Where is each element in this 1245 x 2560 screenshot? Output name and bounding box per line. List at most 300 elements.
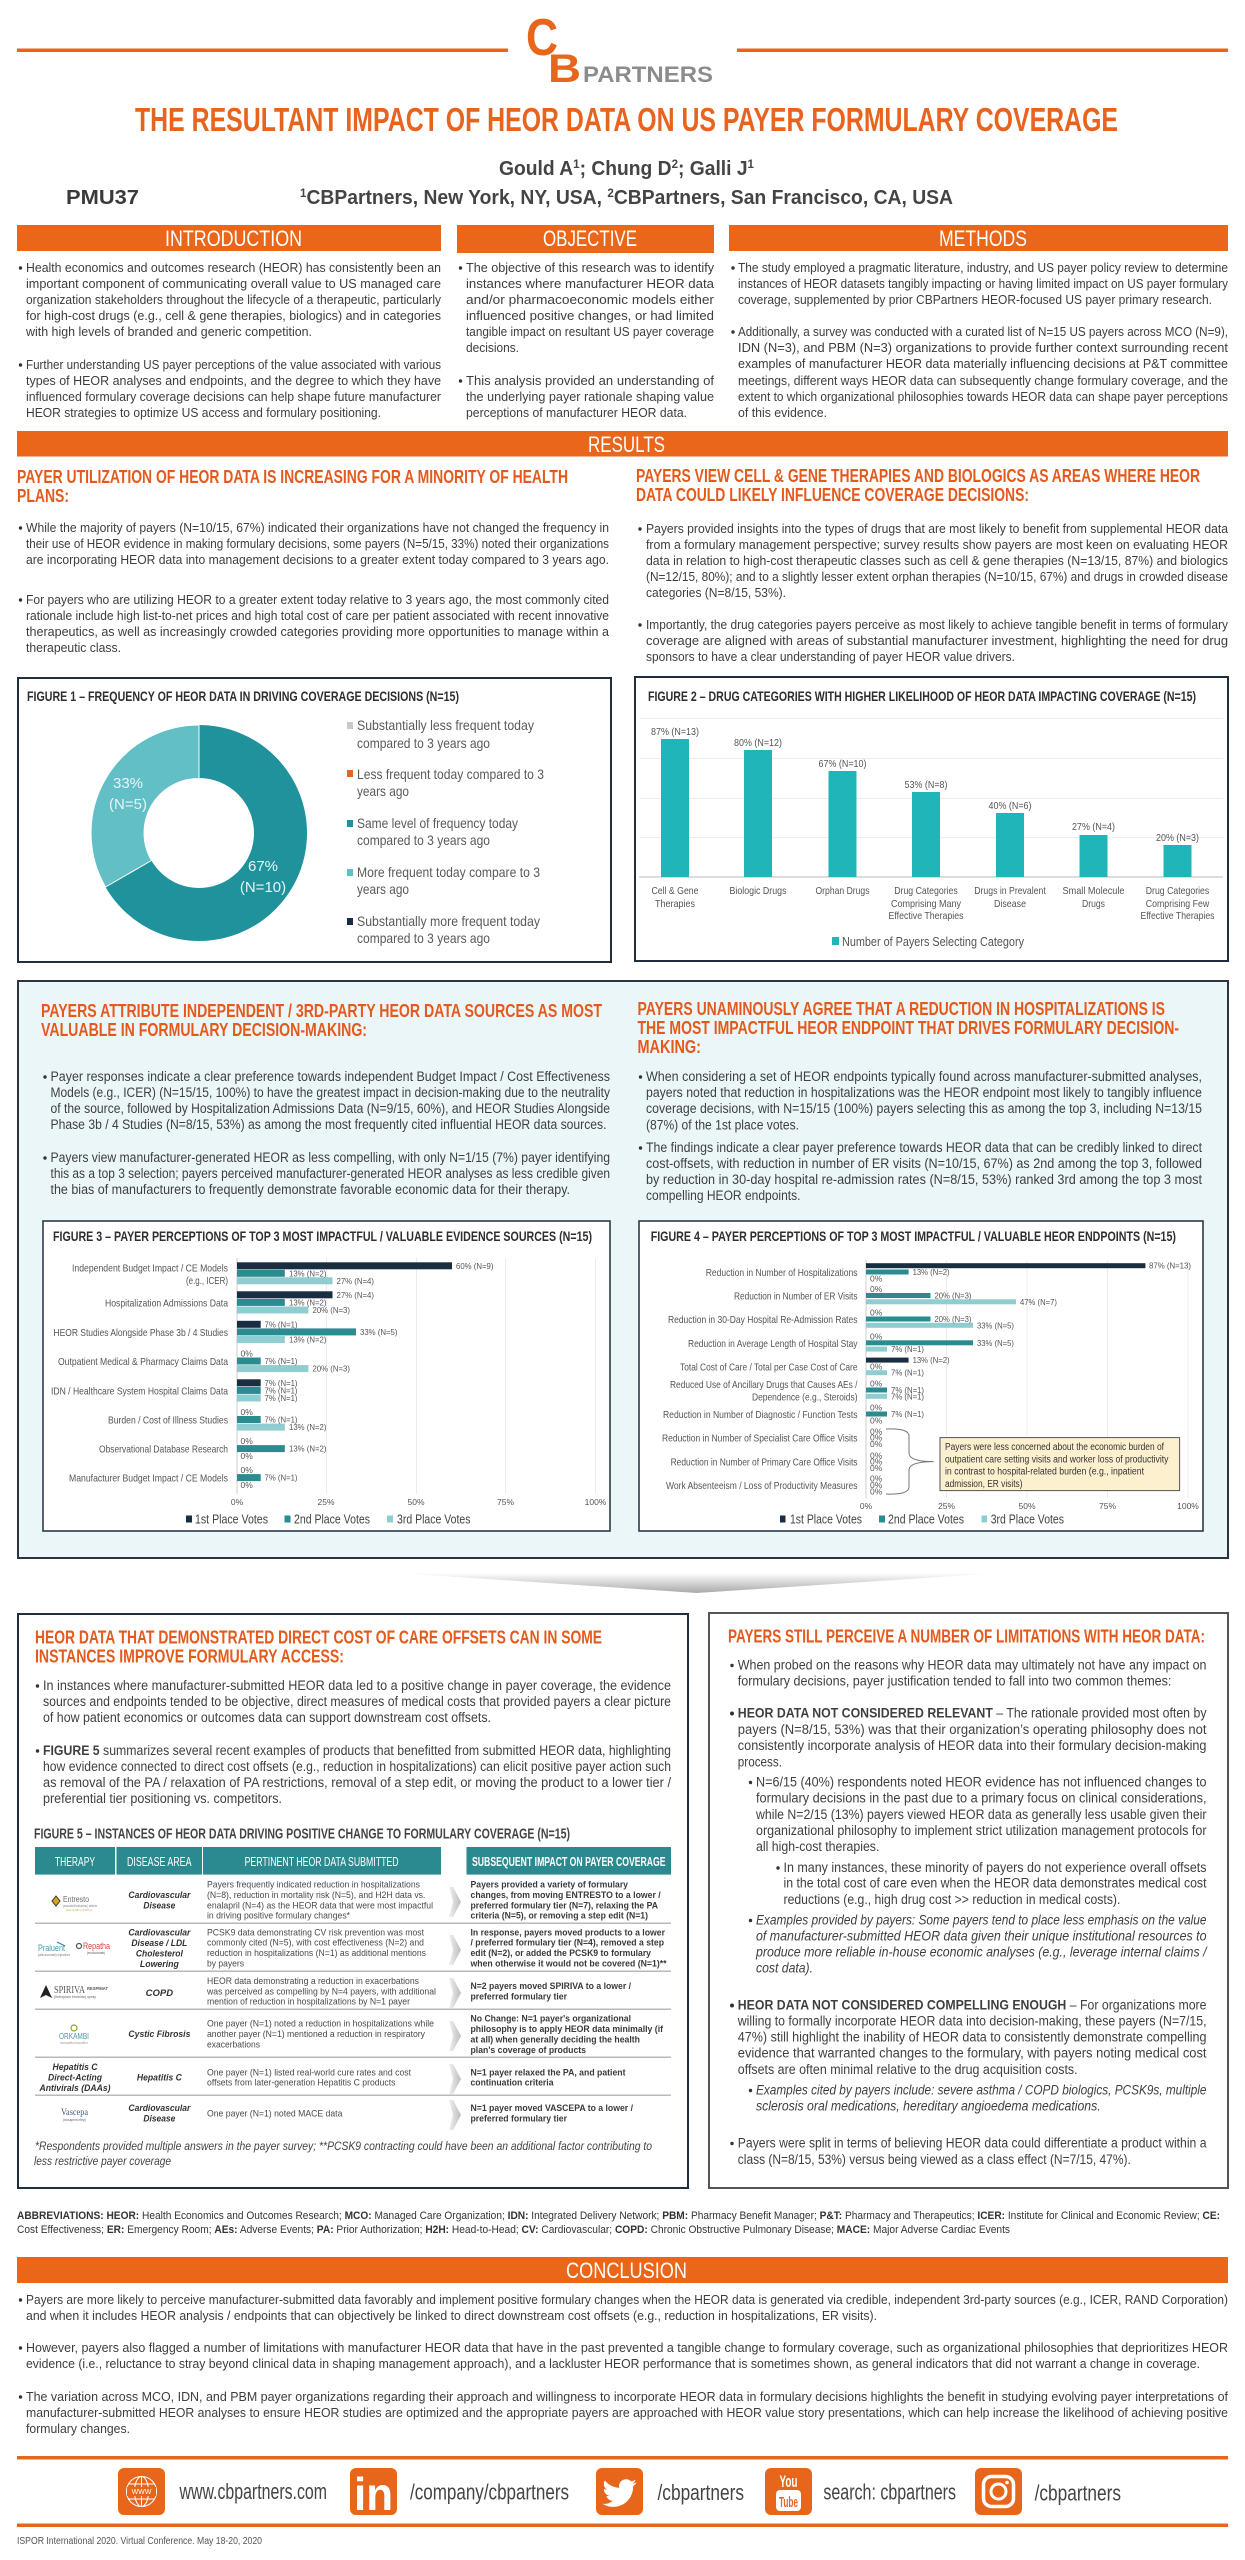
website link: www.cbpartners.com	[179, 2479, 327, 2504]
row: vascepa	[61, 2103, 633, 2124]
bar chart: figure 3: 0%	[240, 1480, 253, 1490]
bar chart: figure 4: Reduction in Number of Hospitalizations	[706, 1267, 858, 1279]
text block: cell and gene therapies: sponsors to have a clear understanding of payer HEOR value drivers.	[646, 649, 1015, 664]
row: entresto: criteria (N=5), or removing a step edit (N=1)	[470, 1911, 648, 1921]
panel: figure 4	[639, 1221, 1203, 1531]
bar chart: figure 2: 80% (N=12)	[734, 737, 782, 749]
logo: entresto	[52, 1895, 97, 1912]
panel: independent sources and endpoints	[18, 981, 1228, 1558]
section: payer utilization	[17, 467, 610, 655]
text block: objective: This analysis provided an understanding of	[466, 373, 714, 388]
row: orkambi: No Change: N=1 payer's organizational	[470, 2014, 631, 2024]
row: vascepa: Disease	[143, 2114, 176, 2124]
donut chart: (N=10)	[240, 879, 286, 896]
bar chart: figure 2: Effective Therapies	[888, 910, 964, 922]
row: entresto: Payers frequently indicated reduction in hospitalizations	[207, 1880, 420, 1890]
authors	[499, 157, 754, 180]
heading: direct cost offsets: INSTANCES IMPROVE FORMULARY ACCESS:	[35, 1646, 344, 1666]
row: hepatitis c: offsets from later-generation Hepatitis C products	[207, 2078, 396, 2088]
row: entresto	[52, 1880, 661, 1921]
icon: website	[118, 2468, 165, 2515]
bar chart: figure 4: 13% (N=2)	[913, 1355, 950, 1365]
text block: conclusion: and when it includes HEOR analysis / endpoints that can objectively be linked to direct downstream cost offsets (e.g., reduction in hospitalizations, ER visits).	[26, 2308, 877, 2323]
bar chart: figure 4: 75%	[1099, 1501, 1116, 1511]
legend: figure 4: 1st Place Votes	[790, 1512, 862, 1526]
text block: limitations: willing to formally incorporate HEOR data into decision-making, these payers (N=7/15,	[737, 2014, 1206, 2028]
footnote	[34, 2139, 652, 2168]
bar chart: figure 2: 27% (N=4)	[1072, 821, 1115, 833]
bar chart: figure 4: Reduction in Number of Specialist Care Office Visits	[662, 1433, 858, 1445]
text block: hospitalizations endpoint: When considering a set of HEOR endpoints typically found across manufacturer-submitted analyses,	[646, 1069, 1202, 1084]
heading: payer utilization	[17, 467, 568, 506]
text block: limitations: process.	[738, 1754, 782, 1770]
bar chart: figure 2: Drugs in Prevalent	[974, 885, 1046, 897]
logo: praluent and repatha: Repatha	[83, 1941, 110, 1951]
icon: website: WWW	[132, 2489, 152, 2496]
section: cell and gene therapies	[636, 466, 1229, 664]
text block: independent sources: Models (e.g., ICER) (N=15/15, 100%) to have the greatest impact in decision-making due to the neutrality	[50, 1085, 610, 1100]
text block: cell and gene therapies: from a formulary management perspective; survey results show payers are most keen on evaluating HEOR	[646, 537, 1228, 552]
donut chart: 67%	[248, 858, 278, 875]
row: entresto: in driving positive formulary changes*	[207, 1911, 350, 1921]
authors: 2	[672, 157, 678, 171]
bar chart: figure 4: 0%	[870, 1361, 883, 1371]
icon: youtube	[765, 2468, 812, 2515]
row: entresto: preferred formulary tier (N=7), relaxing the PA	[470, 1900, 658, 1910]
text block: conclusion	[19, 2292, 1228, 2436]
text block: direct cost offsets: as removal of the PA / relaxation of PA restrictions, removal of a step edit, or moving the product to a lower tier /	[43, 1775, 671, 1790]
heading: cell and gene therapies: DATA COULD LIKELY INFLUENCE COVERAGE DECISIONS:	[636, 485, 1029, 505]
bar chart: figure 2: Disease	[994, 898, 1026, 910]
bar chart: figure 4: 0%	[870, 1433, 883, 1443]
text block: introduction: important component of communicating overall value to US managed care	[26, 276, 441, 291]
text block: limitations: HEOR DATA NOT CONSIDERED COMPELLING ENOUGH – For organizations more	[738, 1998, 1206, 2012]
row: pcsk9: by payers	[207, 1959, 244, 1969]
row: pcsk9: PCSK9 data demonstrating CV risk prevention was most	[207, 1927, 424, 1937]
callout: outpatient care setting visits and worker loss of productivity	[945, 1454, 1168, 1466]
text block: introduction: influenced formulary coverage decisions can help shape future manufacturer	[26, 389, 442, 404]
bar chart: figure 2: Drug Categories	[894, 885, 958, 897]
abbreviations: Cost Effectiveness; ER: Emergency Room; AEs: Adverse Events; PA: Prior Authorization; H2H: Head-to-Head; CV: Cardiovascular; COPD: Chronic Obstructive Pulmonary Disease; MACE: Major Adverse Cardiac Events	[17, 2224, 1010, 2236]
heading: conclusion: CONCLUSION	[566, 2258, 687, 2283]
bar chart: figure 2: Cell & Gene	[652, 885, 699, 897]
instagram link: /cbpartners	[1035, 2480, 1121, 2506]
bar chart: figure 4: 0%	[860, 1501, 873, 1511]
logo: orkambi	[59, 2025, 89, 2045]
row: orkambi: exacerbations	[207, 2040, 260, 2050]
text block: hospitalizations endpoint: cost-offsets, with reduction in number of ER visits (N=10/15, 67%) as 2nd among the top 3, followed	[646, 1156, 1202, 1171]
authors: ; Galli J	[678, 158, 748, 180]
affiliations: CBPartners, New York, NY, USA,	[306, 187, 607, 209]
bar chart: figure 3	[51, 1258, 607, 1507]
heading: payer utilization: PLANS:	[17, 486, 69, 506]
legend: figure 4: 3rd Place Votes	[991, 1512, 1064, 1526]
panel: introduction	[17, 225, 442, 420]
heading: payer utilization: PAYER UTILIZATION OF HEOR DATA IS INCREASING FOR A MINORITY OF HEALTH	[17, 467, 568, 487]
bar chart: figure 3: 13% (N=2)	[289, 1334, 327, 1344]
arrow: wedge	[397, 1573, 1000, 1593]
text block: payer utilization: For payers who are utilizing HEOR to a greater extent today relative to 3 years ago, the most commonly cited	[26, 592, 609, 607]
logo: spiriva: RESPIMAT	[87, 1986, 108, 1991]
bar chart: figure 3: 7% (N=1)	[264, 1385, 298, 1395]
legend: figure 1: More frequent today compare to 3	[357, 864, 540, 880]
footer: conference: ISPOR International 2020. Virtual Conference. May 18-20, 2020	[17, 2536, 262, 2547]
row: pcsk9: commonly cited (N=5), with cost effectiveness (N=2) and	[207, 1938, 424, 1948]
row: spiriva: was perceived as compelling by N=4 payers, with additional	[206, 1986, 436, 1996]
table header: THERAPY	[55, 1855, 95, 1869]
bar chart: figure 4: Total Cost of Care / Total per Case Cost of Care	[680, 1361, 858, 1373]
text block: cell and gene therapies	[638, 521, 1229, 664]
text block: introduction: organization stakeholders throughout the lifecycle of a therapeutic, particularly	[26, 292, 441, 307]
text block: hospitalizations endpoint: (87%) of the 1st place votes.	[646, 1118, 799, 1132]
text block: limitations: offsets are often minimal relative to the drug acquisition costs.	[738, 2062, 1078, 2077]
figure 3 title: FIGURE 3 – PAYER PERCEPTIONS OF TOP 3 MOST IMPACTFUL / VALUABLE EVIDENCE SOURCES (N=15)	[53, 1228, 592, 1244]
row: spiriva: HEOR data demonstrating a reduction in exacerbations	[207, 1976, 419, 1986]
row: pcsk9	[38, 1927, 667, 1970]
row: entresto: Cardiovascular	[128, 1890, 192, 1901]
bar chart: figure 4: 33% (N=5)	[977, 1320, 1014, 1330]
text block: introduction: HEOR strategies to optimize US access and formulary positioning.	[26, 405, 381, 420]
panel: figure 1	[18, 678, 611, 962]
icon: instagram	[975, 2468, 1022, 2515]
text block: independent sources: Payer responses indicate a clear preference towards independent Budget Impact / Cost Effectiveness	[50, 1069, 610, 1084]
bar chart: figure 4: Dependence (e.g., Steroids)	[752, 1392, 858, 1404]
row: orkambi	[59, 2014, 664, 2055]
bar chart: figure 4: 25%	[938, 1501, 955, 1511]
text block: objective: instances where manufacturer HEOR data	[466, 276, 715, 291]
text block: payer utilization	[19, 520, 610, 655]
text block: methods	[731, 260, 1228, 420]
social links	[118, 2468, 1121, 2520]
row: spiriva: preferred formulary tier	[470, 1991, 567, 2001]
row: orkambi: plan's coverage of products	[470, 2045, 586, 2055]
legend: figure 1: years ago	[357, 881, 409, 897]
affiliations: 1	[300, 186, 307, 200]
legend: figure 2: Number of Payers Selecting Category	[842, 934, 1024, 949]
logo: CBPartners: C	[526, 9, 558, 67]
bar chart: figure 2: Orphan Drugs	[816, 885, 870, 897]
authors: 1	[748, 157, 754, 171]
text block: hospitalizations endpoint: The findings indicate a clear payer preference towards HEOR data that can be credibly linked to direct	[646, 1140, 1202, 1155]
row: hepatitis c: N=1 payer relaxed the PA, and patient	[470, 2068, 626, 2078]
text block: conclusion: However, payers also flagged a number of limitations with manufacturer HEOR data that have in the past prevented a tangible change to formulary coverage, such as organizational philosophies that deprioritizes HEOR	[26, 2340, 1228, 2355]
bar chart: figure 2: 20% (N=3)	[1156, 832, 1199, 844]
bar chart: figure 3: (e.g., ICER)	[186, 1275, 228, 1287]
logo: praluent and repatha: Praluent	[38, 1943, 65, 1953]
text block: introduction: Health economics and outcomes research (HEOR) has consistently been an	[26, 260, 441, 275]
panel: figure 3	[43, 1221, 610, 1531]
bar chart: figure 2: 67% (N=10)	[818, 758, 866, 770]
bar chart: figure 2: Small Molecule	[1062, 885, 1125, 897]
bar chart: figure 3: 13% (N=2)	[289, 1268, 327, 1278]
text block: limitations: all high-cost therapies.	[756, 1839, 879, 1854]
row: pcsk9: Lowering	[140, 1959, 179, 1970]
text block: objective: The objective of this research was to identify	[466, 260, 714, 275]
text block: limitations: formulary decisions in the past due to a primary focus on clinical considerations,	[756, 1791, 1206, 1806]
heading: independent sources: VALUABLE IN FORMULARY DECISION-MAKING:	[41, 1020, 367, 1040]
text block: direct cost offsets: sources and endpoints tended to be objective, direct measures of medical costs that provided payers a clear picture	[43, 1694, 671, 1709]
icon: youtube: You	[780, 2472, 798, 2491]
row: pcsk9: / preferred formulary tier (N=4), removed a step	[470, 1938, 664, 1948]
figure 5 title: FIGURE 5 – INSTANCES OF HEOR DATA DRIVING POSITIVE CHANGE TO FORMULARY COVERAGE (N=15)	[34, 1826, 570, 1842]
bar chart: figure 2: 40% (N=6)	[988, 800, 1032, 812]
bar chart: figure 2: 53% (N=8)	[904, 779, 948, 791]
abbreviations	[17, 2210, 1220, 2236]
bar chart: figure 4: 0%	[870, 1426, 883, 1436]
text block: objective: influenced positive changes, or had limited	[466, 308, 714, 323]
logo: spiriva	[40, 1985, 108, 1999]
row: hepatitis c: Hepatitis C	[137, 2072, 182, 2084]
bar chart: figure 2: 87% (N=13)	[651, 726, 699, 738]
text block: direct cost offsets: of how patient economics or outcomes data can support downstream cost offsets.	[43, 1710, 491, 1725]
callout: Payers were less concerned about the economic burden of	[945, 1442, 1164, 1453]
text block: conclusion: formulary changes.	[26, 2421, 130, 2436]
affiliations: 2	[607, 186, 614, 200]
row: hepatitis c: continuation criteria	[470, 2078, 554, 2088]
row: pcsk9: reduction in hospitalizations (N=1) as additional mentions	[207, 1948, 426, 1958]
text block: methods: IDN (N=3), and PBM (N=3) organizations to provide further context surrounding recent	[738, 340, 1228, 355]
bar chart: figure 3: 33% (N=5)	[360, 1327, 398, 1337]
row: spiriva: N=2 payers moved SPIRIVA to a lower /	[470, 1981, 631, 1991]
bar chart: figure 3: 20% (N=3)	[312, 1364, 350, 1374]
bar chart: figure 3: 13% (N=2)	[289, 1444, 327, 1454]
twitter link: /cbpartners	[658, 2480, 744, 2505]
bar chart: figure 4: Reduction in Number of Diagnostic / Function Tests	[663, 1409, 858, 1421]
logo: CBPartners	[526, 9, 713, 91]
panel: limitations	[709, 1613, 1228, 2188]
row: orkambi: another payer (N=1) mentioned a reduction in respiratory	[207, 2029, 425, 2039]
donut chart	[91, 725, 286, 914]
bar chart: figure 4: Reduction in Number of ER Visits	[734, 1290, 858, 1302]
row: hepatitis c: Direct-Acting	[48, 2072, 102, 2084]
arrows: table rows	[449, 1887, 461, 2130]
legend: figure 1: years ago	[357, 783, 409, 799]
bar chart: figure 2	[639, 718, 1223, 922]
text block: hospitalizations endpoint: by reduction in 30-day hospital re-admission rates (N=8/15, 53%) ranked 3rd among the top 3 most	[646, 1172, 1202, 1187]
text block: limitations: produce more reliable in-house economic analyses (e.g., leverage internal claims /	[755, 1944, 1208, 1960]
bar chart: figure 3: 27% (N=4)	[336, 1276, 374, 1286]
text block: limitations: payers (N=8/15, 53%) was that their organization’s operating philosophy does not	[738, 1722, 1207, 1737]
affiliations	[300, 186, 953, 209]
text block: limitations: formulary decisions, payer justification tended to fall into two common themes:	[738, 1674, 1171, 1689]
row: orkambi: Cystic Fibrosis	[128, 2029, 190, 2040]
bar chart: figure 4: 0%	[870, 1463, 883, 1473]
bar chart: figure 3: HEOR Studies Alongside Phase 3b / 4 Studies	[54, 1327, 228, 1339]
text block: payer utilization: are incorporating HEOR data into management decisions to a greater extent today compared to 3 years ago.	[26, 552, 609, 567]
footnote: *Respondents provided multiple answers in the payer survey; **PCSK9 contracting could have been an additional factor contributing to	[35, 2139, 652, 2153]
bar chart: figure 4: 7% (N=1)	[891, 1385, 924, 1395]
text block: independent sources: this as a top 3 selection; payers perceived manufacturer-generated HEOR analyses as less credible given	[50, 1166, 610, 1181]
bar chart: figure 4: 0%	[870, 1439, 883, 1449]
row: vascepa: Cardiovascular	[128, 2103, 192, 2114]
row: spiriva: mention of reduction in hospitalizations by N=1 payer	[207, 1997, 410, 2007]
bar chart: figure 3: 75%	[497, 1497, 514, 1507]
legend: figure 1: compared to 3 years ago	[357, 735, 490, 751]
text block: hospitalizations endpoint	[639, 1069, 1202, 1203]
row: entresto: enalapril (N=4) as the HEOR data that were most impactful	[207, 1900, 433, 1910]
text block: payer utilization: While the majority of payers (N=10/15, 67%) indicated their organizations have not changed the frequency in	[26, 520, 609, 535]
row: spiriva	[40, 1976, 631, 2007]
bar chart: figure 4: 87% (N=13)	[1149, 1261, 1191, 1271]
bar chart: figure 4: 20% (N=3)	[934, 1290, 972, 1300]
bar chart: figure 2: Effective Therapies	[1140, 910, 1214, 922]
logo: entresto: 24/26 mg 49/51 mg 97/103 mg	[66, 1908, 92, 1912]
logo: orkambi: ORKAMBI	[59, 2032, 89, 2041]
bar chart: figure 4: 47% (N=7)	[1020, 1297, 1057, 1307]
legend: figure 1: Same level of frequency today	[357, 815, 518, 831]
icon: twitter	[596, 2468, 643, 2515]
bar chart: figure 3: 13% (N=2)	[289, 1297, 327, 1307]
text block: objective: decisions.	[466, 340, 519, 355]
icon: youtube: Tube	[779, 2494, 798, 2511]
heading: independent sources	[41, 1001, 602, 1040]
text block: hospitalizations endpoint: payers noted that reduction in hospitalizations was the HEOR endpoint most likely to tangibly influence	[646, 1085, 1202, 1100]
text block: limitations: 47%) still highlight the inability of HEOR data to consistently demonstrate compelling	[738, 2030, 1206, 2044]
text block: limitations	[730, 1658, 1208, 2167]
youtube link: search: cbpartners	[823, 2480, 956, 2504]
text block: methods: coverage, supplemented by prior CBPartners HEOR-focused US payer primary research.	[738, 292, 1212, 307]
bar chart: figure 4: Reduced Use of Ancillary Drugs that Causes AEs /	[670, 1379, 858, 1391]
bar chart: figure 3: 7% (N=1)	[264, 1473, 298, 1483]
bar chart: figure 3: 50%	[407, 1497, 425, 1507]
text block: methods: of this evidence.	[738, 405, 827, 420]
bar chart: figure 3: 100%	[585, 1497, 607, 1507]
heading: hospitalizations endpoint	[638, 999, 1179, 1057]
text block: limitations: When probed on the reasons why HEOR data may ultimately not have any impact on	[738, 1658, 1206, 1672]
text block: objective: perceptions of manufacturer HEOR data.	[466, 405, 687, 420]
row: pcsk9: edit (N=2), or added the PCSK9 to formulary	[470, 1948, 651, 1958]
row: vascepa: N=1 payer moved VASCEPA to a lower /	[470, 2103, 633, 2113]
row: vascepa: One payer (N=1) noted MACE data	[207, 2108, 342, 2118]
icon: brace	[886, 1429, 934, 1494]
text block: objective: the underlying payer rationale shaping value	[466, 389, 714, 404]
text block: limitations: in the total cost of care even when the HEOR data demonstrates medical cost	[784, 1876, 1207, 1891]
legend: figure 3	[186, 1512, 470, 1526]
logo: entresto: (sacubitril/valsartan) tablets	[63, 1904, 97, 1908]
callout	[940, 1438, 1180, 1491]
logo: praluent and repatha	[38, 1941, 110, 1957]
text block: limitations: evidence that warranted changes to the formulary, with payers noting medical cost	[738, 2046, 1207, 2060]
logo: vascepa	[61, 2107, 88, 2122]
bar chart: figure 3: 0%	[240, 1348, 253, 1358]
legend: figure 3: 2nd Place Votes	[294, 1512, 370, 1526]
figure 1 title: FIGURE 1 – FREQUENCY OF HEOR DATA IN DRIVING COVERAGE DECISIONS (N=15)	[27, 688, 459, 704]
bar chart: figure 3: 60% (N=9)	[456, 1261, 494, 1271]
heading: results	[17, 431, 1228, 457]
text block: cell and gene therapies: categories (N=8/15, 53%).	[646, 585, 786, 600]
panel: direct cost offsets	[18, 1614, 688, 2188]
row: hepatitis c: One payer (N=1) listed real-world cure rates and cost	[207, 2068, 411, 2078]
row: orkambi: at all) when generally deciding the health	[470, 2034, 640, 2044]
bar chart: figure 4: 20% (N=3)	[934, 1314, 972, 1324]
row: orkambi: One payer (N=1) noted a reduction in hospitalizations while	[207, 2019, 434, 2029]
authors: Gould A	[499, 158, 576, 180]
bar chart: figure 4: 0%	[870, 1480, 883, 1490]
bar chart: figure 4: 33% (N=5)	[977, 1338, 1014, 1348]
text block: direct cost offsets: how evidence connected to direct cost offsets (e.g., reduction in hospitalizations) can elicit positive payer action such	[43, 1759, 671, 1774]
row: hepatitis c: Antivirals (DAAs)	[39, 2083, 110, 2094]
bar chart: figure 3: Burden / Cost of Illness Studies	[108, 1414, 228, 1426]
heading: introduction: INTRODUCTION	[165, 226, 302, 251]
text block: independent sources: of the source, followed by Hospitalization Admissions Data (N=9/15, 60%), and HEOR Studies Alongside	[50, 1101, 610, 1116]
bar chart: figure 4: Reduction in Number of Primary Care Office Visits	[671, 1457, 858, 1469]
text block: limitations: class (N=8/15, 53%) versus being viewed as a class effect (N=7/15, 47%).	[738, 2152, 1131, 2167]
callout: in contrast to hospital-related burden (e.g., inpatient	[945, 1467, 1144, 1478]
bar chart: figure 3: 7% (N=1)	[264, 1393, 298, 1403]
row: vascepa: preferred formulary tier	[470, 2114, 567, 2124]
bar chart: figure 4: 0%	[870, 1308, 883, 1318]
bar chart: figure 3: 0%	[240, 1451, 253, 1461]
logo: entresto: Entresto	[63, 1895, 89, 1904]
bar chart: figure 3: 7% (N=1)	[264, 1319, 298, 1329]
bar chart: figure 3: Hospitalization Admissions Data	[105, 1297, 228, 1309]
text block: direct cost offsets: FIGURE 5 summarizes several recent examples of products that benefitted from submitted HEOR data, highlighting	[43, 1743, 671, 1758]
bar chart: figure 4: 0%	[870, 1379, 883, 1389]
text block: introduction	[19, 260, 442, 420]
text block: payer utilization: their use of HEOR evidence in making formulary decisions, some payers (N=5/15, 33%) noted their organizations	[26, 536, 609, 551]
text block: objective: tangible impact on resultant US payer coverage	[466, 324, 714, 339]
heading: direct cost offsets	[35, 1628, 602, 1666]
legend: figure 1: compared to 3 years ago	[357, 930, 490, 946]
table header: PERTINENT HEOR DATA SUBMITTED	[245, 1855, 399, 1869]
legend: figure 3: 1st Place Votes	[195, 1512, 268, 1526]
donut chart: (N=5)	[109, 796, 147, 813]
bar chart: figure 4: Reduction in 30-Day Hospital Re-Admission Rates	[668, 1314, 858, 1326]
text block: independent sources: Payers view manufacturer-generated HEOR as less compelling, with only N=1/15 (7%) payer identifying	[50, 1150, 610, 1165]
affiliations: CBPartners, San Francisco, CA, USA	[614, 187, 953, 209]
bar chart: figure 4: 0%	[870, 1474, 883, 1484]
legend: figure 1: compared to 3 years ago	[357, 832, 490, 848]
text block: introduction: with high levels of branded and generic competition.	[25, 324, 312, 339]
text block: limitations: cost data).	[756, 1960, 813, 1976]
row: spiriva: COPD	[146, 1988, 173, 1999]
bar chart: figure 3: 0%	[240, 1465, 253, 1475]
text block: independent sources: the bias of manufacturers to frequently demonstrate favorable economic data for their therapy.	[50, 1182, 570, 1197]
row: pcsk9: Cardiovascular	[128, 1928, 192, 1938]
panel: figure 2	[635, 677, 1228, 961]
bar chart: figure 3: 27% (N=4)	[336, 1290, 374, 1300]
bar chart: figure 2: Drug Categories	[1146, 885, 1209, 897]
bar chart: figure 2: Comprising Many	[891, 898, 962, 910]
heading: independent sources: PAYERS ATTRIBUTE INDEPENDENT / 3RD-PARTY HEOR DATA SOURCES AS MOST	[41, 1001, 602, 1021]
bar chart: figure 4: 0%	[870, 1457, 883, 1467]
row: entresto: Payers provided a variety of formulary	[470, 1880, 628, 1890]
text block: introduction: for high-cost drugs (e.g., cell & gene therapies, biologics) and in categories	[26, 308, 441, 323]
bar chart: figure 2: Therapies	[655, 898, 695, 910]
row: entresto: changes, from moving ENTRESTO to a lower /	[470, 1890, 661, 1900]
text block: direct cost offsets: In instances where manufacturer-submitted HEOR data led to a positive change in payer coverage, the evidence	[43, 1678, 671, 1693]
logo: vascepa: Vascepa	[61, 2107, 88, 2117]
bar chart: figure 3: 0%	[240, 1436, 253, 1446]
bar chart: figure 4: Work Absenteeism / Loss of Productivity Measures	[666, 1480, 858, 1492]
bar chart: figure 2: Comprising Few	[1146, 898, 1210, 910]
text block: independent sources: Phase 3b / 4 Studies (N=8/15, 53%) as among the most frequently cited influential HEOR data sources.	[50, 1117, 606, 1132]
text block: introduction: types of HEOR analyses and endpoints, and the degree to which they have	[26, 373, 441, 388]
bar chart: figure 4: 0%	[870, 1415, 883, 1425]
text block: payer utilization: rationale include high list-to-net prices and high total cost of care per patient associated with recent innovative	[26, 608, 609, 623]
text block: limitations: reductions (e.g., high drug cost >> reduction in medical costs).	[784, 1892, 1120, 1907]
bar chart: figure 4: 7% (N=1)	[891, 1391, 924, 1401]
row: entresto: (N=8), reduction in mortality risk (N=5), and H2H data vs.	[207, 1890, 425, 1900]
logo: CBPartners: B	[548, 47, 581, 91]
heading: results: RESULTS	[588, 432, 665, 457]
row: pcsk9: when otherwise it would not be covered (N=1)**	[470, 1959, 667, 1969]
text block: payer utilization: therapeutic class.	[26, 640, 121, 655]
text block: direct cost offsets: preferential tier positioning vs. competitors.	[43, 1791, 282, 1806]
bar chart: figure 3: 20% (N=3)	[312, 1305, 350, 1315]
bar chart: figure 4	[662, 1260, 1199, 1511]
bar chart: figure 4: 0%	[870, 1486, 883, 1496]
